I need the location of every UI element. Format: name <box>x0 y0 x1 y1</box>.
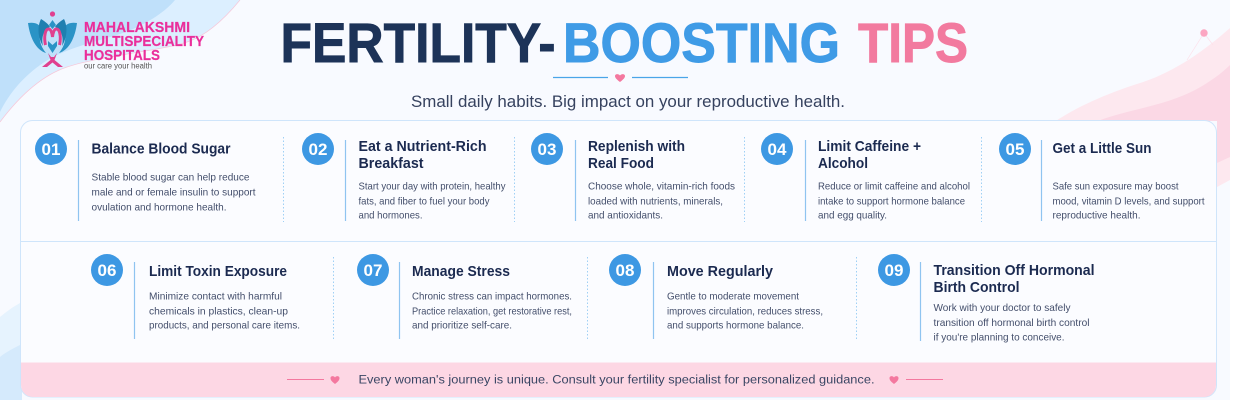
logo name: MULTISPECIALITY <box>84 33 204 50</box>
tip 07: 07 <box>364 261 382 280</box>
tagline: our care your health <box>84 62 152 70</box>
tip 01: ovulation and hormone health. <box>92 202 226 214</box>
tip 08: improves circulation, reduces stress, <box>667 306 823 318</box>
tip 04: and egg quality. <box>818 210 887 222</box>
tip 08: Gentle to moderate movement <box>667 292 799 302</box>
tip 03: loaded with nutrients, minerals, <box>588 196 723 208</box>
tip 04: Alcohol <box>818 155 868 172</box>
tip 03: and antioxidants. <box>588 210 663 222</box>
logo name <box>84 19 204 64</box>
footer band <box>21 362 1216 397</box>
tip 06: Minimize contact with harmful <box>149 292 282 302</box>
tip 05: 05 <box>1006 140 1024 159</box>
tip 02: and hormones. <box>358 210 422 222</box>
tip 01: Stable blood sugar can help reduce <box>92 172 250 184</box>
tip 04: 04 <box>768 140 787 159</box>
tip 09: 09 <box>885 261 903 280</box>
tip 05: Get a Little Sun <box>1052 140 1152 157</box>
tip 06: Limit Toxin Exposure <box>149 263 287 280</box>
tip 09: Work with your doctor to safely <box>934 303 1071 314</box>
logo name: HOSPITALS <box>84 47 160 64</box>
tip 02 <box>302 133 506 222</box>
tip 04: intake to support hormone balance <box>818 196 965 208</box>
tip 01: male and or female insulin to support <box>92 188 256 198</box>
tip 08: and supports hormone balance. <box>667 320 804 332</box>
tip 02: Breakfast <box>358 155 424 172</box>
tip 04 <box>761 133 970 222</box>
tip 05: Safe sun exposure may boost <box>1052 182 1179 192</box>
tip 02: fats, and fiber to fuel your body <box>358 196 490 208</box>
tip 08: 08 <box>616 261 634 280</box>
logo <box>28 11 204 70</box>
tip 09: if you're planning to conceive. <box>934 332 1064 344</box>
tip 06: chemicals in plastics, clean-up <box>149 306 288 318</box>
logo name: MAHALAKSHMI <box>84 19 190 36</box>
tip 06: 06 <box>98 261 116 280</box>
title divider with heart <box>553 74 688 82</box>
title: TIPS <box>858 11 968 74</box>
title <box>280 11 968 74</box>
icon: heart <box>330 376 340 384</box>
tip 09: transition off hormonal birth control <box>934 318 1090 329</box>
tip 03: 03 <box>538 140 556 159</box>
tip 03 <box>531 133 735 222</box>
tip 09: Birth Control <box>934 279 1020 296</box>
tip 02: Eat a Nutrient-Rich <box>358 138 486 155</box>
tip 03: Choose whole, vitamin-rich foods <box>588 182 735 192</box>
tip 07 <box>357 254 572 339</box>
tip 07: and prioritize self-care. <box>412 320 512 332</box>
icon: heart <box>890 376 898 384</box>
tip 06 <box>91 254 300 339</box>
tip 05: mood, vitamin D levels, and support <box>1052 196 1205 208</box>
tip 07: Manage Stress <box>412 263 510 280</box>
tip 02: Start your day with protein, healthy <box>358 182 506 192</box>
tip 02: 02 <box>309 140 327 159</box>
tip 03: Replenish with <box>588 138 685 155</box>
title: FERTILITY- <box>280 11 556 74</box>
title: BOOSTING <box>563 11 840 74</box>
tip 05 <box>999 133 1205 222</box>
footer text: Every woman's journey is unique. Consult your fertility specialist for personalized guidance. <box>358 374 874 386</box>
icon: lotus <box>28 11 77 67</box>
subtitle: Small daily habits. Big impact on your reproductive health. <box>411 93 845 111</box>
tip 08: Move Regularly <box>667 263 774 280</box>
tip 01: Balance Blood Sugar <box>92 140 231 158</box>
tip 06: products, and personal care items. <box>149 320 300 332</box>
tip 09 <box>878 254 1094 344</box>
tip 07: Practice relaxation, get restorative rest, <box>412 306 572 318</box>
tip 09: Transition Off Hormonal <box>934 262 1094 279</box>
tip 08 <box>609 254 823 339</box>
tip 03: Real Food <box>588 155 654 172</box>
tip 01 <box>35 133 256 221</box>
tip 07: Chronic stress can impact hormones. <box>412 292 572 302</box>
main panel <box>20 120 1216 397</box>
tip 04: Reduce or limit caffeine and alcohol <box>818 182 970 192</box>
tip 05: reproductive health. <box>1052 210 1140 222</box>
tip 01: 01 <box>42 140 60 159</box>
tip 04: Limit Caffeine + <box>818 138 921 155</box>
